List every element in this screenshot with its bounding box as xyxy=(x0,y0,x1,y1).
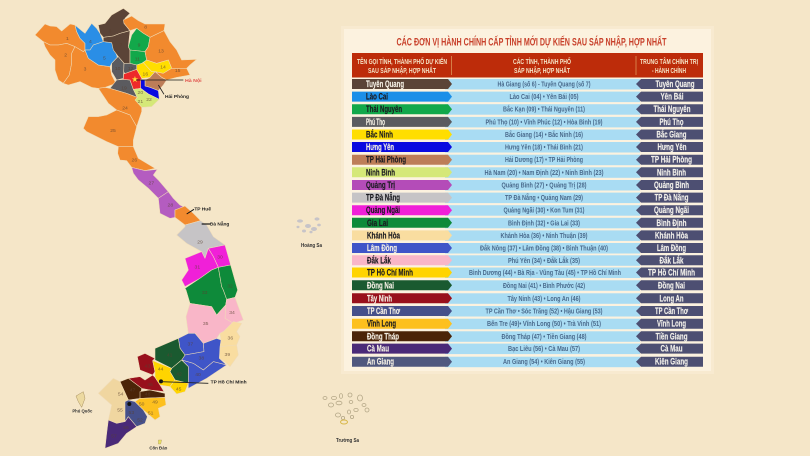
map: southern Vietnam: 50 xyxy=(139,402,145,408)
row: Cà Mau: Bạc Liêu (56) • Cà Mau (57) xyxy=(508,344,580,353)
icon: Hà Nội star: ★ xyxy=(132,77,139,84)
map: northern Vietnam xyxy=(35,8,202,147)
map: southern Vietnam: 46 xyxy=(147,382,153,388)
table header: SÁP NHẬP, HỢP NHẤT xyxy=(514,65,570,75)
islands: Trường Sa xyxy=(323,393,369,420)
map: southern Vietnam: 38 xyxy=(199,356,204,362)
row: Phú Thọ xyxy=(352,117,703,127)
map: northern Vietnam: 5 xyxy=(103,55,106,61)
row: Đồng Tháp: Đồng Tháp xyxy=(367,331,399,341)
map: southern Vietnam: 35 xyxy=(203,321,209,327)
map: southern Vietnam: 47 xyxy=(130,388,136,394)
leader: Hà Nội xyxy=(136,79,183,81)
map: northern Vietnam: 6 xyxy=(109,29,112,35)
row: Tây Ninh: Tây Ninh (43) • Long An (46) xyxy=(508,294,581,303)
title: CÁC ĐƠN VỊ HÀNH CHÍNH CẤP TỈNH MỚI DỰ KIẾN SAU SÁP NHẬP, HỢP NHẤT xyxy=(396,36,667,48)
row: Ninh Bình: Hà Nam (20) • Nam Định (22) • Ninh Bình (23) xyxy=(484,168,604,177)
map: northern Vietnam: 13 xyxy=(158,48,164,54)
row: Ninh Bình: Ninh Bình xyxy=(657,167,686,177)
map: northern Vietnam: 21 xyxy=(138,99,143,105)
row: An Giang xyxy=(352,357,703,367)
row: Gia Lai: Bình Định (32) • Gia Lai (33) xyxy=(508,218,580,227)
row: Gia Lai: Bình Định xyxy=(656,218,686,228)
island: Trường Sa highlighted xyxy=(340,420,348,424)
row: TP Hải Phòng: TP Hải Phòng xyxy=(366,155,406,165)
row: Quảng Ngãi: Quảng Ngãi (30) • Kon Tum (31) xyxy=(504,206,585,215)
map: northern Vietnam: 4 xyxy=(89,39,92,45)
row: Lào Cai: Lào Cai (04) • Yên Bái (05) xyxy=(510,92,579,101)
row: Phú Thọ: Phú Thọ xyxy=(660,117,684,127)
row: Lâm Đồng: Lâm Đồng xyxy=(657,243,686,253)
leader: TP Huế xyxy=(187,209,194,214)
map: southern Vietnam xyxy=(72,265,247,450)
map: central Vietnam: 28 xyxy=(168,203,173,209)
row: Quảng Trị: Quảng Bình xyxy=(654,180,689,190)
row: Bắc Ninh xyxy=(352,128,703,140)
row: Quảng Trị xyxy=(352,180,703,190)
row: Ninh Bình: Ninh Bình xyxy=(366,167,395,177)
row: Vĩnh Long: Vĩnh Long xyxy=(657,319,686,329)
label: Đà Nẵng: Đà Nẵng xyxy=(210,220,229,226)
row: Thái Nguyên: Bắc Kạn (09) • Thái Nguyên (11) xyxy=(503,105,585,114)
map: central Vietnam: 26 xyxy=(132,157,137,163)
row: TP Hồ Chí Minh: TP Hồ Chí Minh xyxy=(648,268,695,278)
row: TP Đà Nẵng: TP Đà Nẵng • Quảng Nam (29) xyxy=(505,193,583,202)
island: Côn Đảo xyxy=(158,440,162,444)
row: TP Hải Phòng xyxy=(352,155,703,165)
map: southern Vietnam: 53 xyxy=(129,410,134,416)
row: Tây Ninh xyxy=(352,293,703,304)
row: Vĩnh Long xyxy=(352,319,703,329)
row: Đồng Tháp: Đồng Tháp (47) • Tiền Giang (48) xyxy=(502,332,587,341)
row: Đắk Lắk: Phú Yên (34) • Đắk Lắk (35) xyxy=(508,256,580,265)
row: Hưng Yên: Hưng Yên xyxy=(366,142,394,152)
row: Hưng Yên: Hưng Yên xyxy=(658,142,686,152)
panel: table background xyxy=(341,26,714,374)
label: Phú Quốc: Phú Quốc xyxy=(72,408,93,414)
row: Khánh Hòa: Khánh Hòa xyxy=(367,230,400,240)
row: Khánh Hòa: Khánh Hòa xyxy=(655,230,688,240)
row: Đồng Nai: Đồng Nai (41) • Bình Phước (42) xyxy=(503,281,585,290)
map: northern Vietnam: 22 xyxy=(146,97,152,103)
row: Thái Nguyên: Thái Nguyên xyxy=(366,104,402,114)
map: southern Vietnam: 37 xyxy=(188,342,193,348)
row: Lâm Đồng: Lâm Đồng xyxy=(367,243,397,253)
row: Hưng Yên xyxy=(352,142,703,152)
row: Bắc Ninh: Bắc Giang xyxy=(656,128,686,140)
map: northern Vietnam: 8 xyxy=(144,24,147,30)
row: Thái Nguyên xyxy=(352,104,703,115)
leader: Hải Phòng xyxy=(158,85,164,94)
table rows xyxy=(352,79,703,367)
leader: Đà Nẵng xyxy=(202,222,210,226)
row: TP Hải Phòng: Hải Dương (17) • TP Hải Phòng xyxy=(505,155,583,164)
table header: - HÀNH CHÍNH xyxy=(652,66,686,75)
row: Phú Thọ: Phú Thọ (10) • Vĩnh Phúc (12) • Hòa Bình (19) xyxy=(486,117,603,126)
row: TP Đà Nẵng: TP Đà Nẵng xyxy=(366,192,400,203)
row: TP Cần Thơ: TP Cần Thơ xyxy=(367,306,400,316)
row: TP Hồ Chí Minh: TP Hồ Chí Minh xyxy=(367,268,413,278)
map: northern Vietnam: 1 xyxy=(66,36,69,42)
row: Hưng Yên: Hưng Yên (18) • Thái Bình (21) xyxy=(505,142,583,152)
map: northern Vietnam: 25 xyxy=(110,128,116,134)
row: TP Cần Thơ: TP Cần Thơ xyxy=(655,306,688,316)
map: northern Vietnam: 12 xyxy=(128,66,134,72)
table header xyxy=(352,53,703,78)
map: southern Vietnam: 40 xyxy=(195,372,201,378)
row: An Giang: Kiên Giang xyxy=(655,357,688,367)
map: southern Vietnam: 48 xyxy=(145,391,151,397)
map: northern Vietnam: 3 xyxy=(84,67,87,73)
label: Côn Đảo: Côn Đảo xyxy=(149,445,167,450)
row: Đồng Tháp xyxy=(352,331,703,342)
row: Cà Mau: Cà Mau xyxy=(660,344,682,354)
map: central Vietnam: 27 xyxy=(149,180,154,186)
row: An Giang: An Giang xyxy=(367,357,394,367)
row: Đồng Nai: Đồng Nai xyxy=(658,280,685,290)
row: Đồng Nai: Đồng Nai xyxy=(367,280,394,290)
label: Hoàng Sa: Hoàng Sa xyxy=(301,243,322,249)
marker: TP Hồ Chí Minh xyxy=(159,379,163,383)
label: Hải Phòng: Hải Phòng xyxy=(165,94,189,99)
map: northern Vietnam: 19 xyxy=(121,85,127,91)
row: Lào Cai: Yên Bái xyxy=(660,92,684,102)
map: southern Vietnam: 39 xyxy=(225,352,230,358)
map: northern Vietnam: 11 xyxy=(135,57,140,63)
map: central Vietnam: 30 xyxy=(217,255,223,261)
row: Tuyên Quang xyxy=(352,79,703,90)
row: Gia Lai xyxy=(352,218,703,228)
row: Cà Mau xyxy=(352,344,703,354)
map: southern Vietnam: 52 xyxy=(137,417,143,423)
label: Hà Nội: Hà Nội xyxy=(185,78,202,83)
row: TP Đà Nẵng xyxy=(352,192,703,203)
map: southern Vietnam: 32 xyxy=(227,283,233,289)
map: central Vietnam xyxy=(118,147,231,287)
table header: CÁC TỈNH, THÀNH PHỐ xyxy=(513,56,571,66)
marker: Cần Thơ xyxy=(127,402,131,406)
map: southern Vietnam: 55 xyxy=(117,408,123,414)
map: southern Vietnam: 42 xyxy=(176,371,182,377)
map: southern Vietnam: 33 xyxy=(202,290,208,296)
row: Cà Mau: Cà Mau xyxy=(367,344,389,354)
map: northern Vietnam: 9 xyxy=(138,43,141,49)
row: Quảng Ngãi: Quảng Ngãi xyxy=(366,205,400,215)
map: northern Vietnam: 15 xyxy=(175,68,181,74)
row: Tuyên Quang: Tuyên Quang xyxy=(656,79,694,89)
row: Quảng Ngãi: Quảng Ngãi xyxy=(654,205,689,215)
leader: TP Hồ Chí Minh xyxy=(161,382,208,383)
label: Trường Sa: Trường Sa xyxy=(336,438,359,444)
row: Lào Cai xyxy=(352,92,703,102)
map: northern Vietnam: 10 xyxy=(115,66,121,72)
row: Đắk Lắk: Đắk Lắk xyxy=(660,254,684,265)
row: Phú Thọ: Phú Thọ xyxy=(366,117,385,127)
table header: SAU SÁP NHẬP, HỢP NHẤT xyxy=(368,65,436,75)
map: southern Vietnam: 44 xyxy=(158,366,164,372)
map: central Vietnam: 29 xyxy=(197,239,203,245)
map: northern Vietnam: 14 xyxy=(160,64,166,70)
row: Bắc Ninh: Bắc Ninh xyxy=(366,128,393,140)
row: Đồng Nai xyxy=(352,280,703,291)
map: northern Vietnam: 20 xyxy=(138,90,143,96)
islands: Hoàng Sa xyxy=(296,217,321,233)
table header: TRUNG TÂM CHÍNH TRỊ xyxy=(640,57,698,66)
table header: TÊN GỌI TỈNH, THÀNH PHỐ DỰ KIẾN xyxy=(357,56,447,66)
row: Lào Cai: Lào Cai xyxy=(366,92,388,102)
map: southern Vietnam: 45 xyxy=(176,386,182,392)
row: TP Cần Thơ xyxy=(352,306,703,316)
row: Bắc Ninh: Bắc Giang (14) • Bắc Ninh (16) xyxy=(505,130,583,139)
row: TP Đà Nẵng: TP Đà Nẵng xyxy=(654,192,688,203)
map: northern Vietnam: 24 xyxy=(122,106,128,112)
map: southern Vietnam: 54 xyxy=(118,391,124,397)
map: southern Vietnam: 34 xyxy=(229,310,235,316)
map: southern Vietnam: 49 xyxy=(152,399,158,405)
map: southern Vietnam: 56 xyxy=(123,425,129,431)
row: Đồng Tháp: Tiền Giang xyxy=(656,331,688,341)
row: Thái Nguyên: Thái Nguyên xyxy=(654,104,690,114)
row: Khánh Hòa xyxy=(352,230,703,241)
row: Đắk Lắk: Đắk Lắk xyxy=(367,254,391,265)
label: TP Huế: TP Huế xyxy=(194,205,211,211)
row: An Giang: An Giang (54) • Kiên Giang (55) xyxy=(503,357,585,366)
row: Lâm Đồng xyxy=(352,243,703,254)
row: Tây Ninh: Long An xyxy=(660,293,684,303)
island: Phú Quốc xyxy=(76,392,85,407)
row: TP Hồ Chí Minh xyxy=(352,268,703,278)
row: Vĩnh Long: Vĩnh Long xyxy=(367,319,396,329)
row: Vĩnh Long: Bến Tre (49)• Vĩnh Long (50) • Trà Vinh (51) xyxy=(487,319,601,328)
map: central Vietnam: 31 xyxy=(195,265,200,271)
row: TP Cần Thơ: TP Cần Thơ • Sóc Trăng (52) • Hậu Giang (53) xyxy=(486,306,603,316)
map: southern Vietnam: 41 xyxy=(167,352,173,358)
row: TP Hồ Chí Minh: Bình Dương (44) • Bà Rịa - Vũng Tàu (45) • TP Hồ Chí Minh xyxy=(469,268,621,277)
row: Khánh Hòa: Khánh Hòa (36) • Ninh Thuận (39) xyxy=(500,231,588,240)
map: southern Vietnam: 57 xyxy=(111,433,117,439)
row: TP Hải Phòng: TP Hải Phòng xyxy=(651,155,692,165)
row: Gia Lai: Gia Lai xyxy=(367,218,388,228)
row: Quảng Trị: Quảng Trị xyxy=(366,180,395,190)
map: southern Vietnam: 43 xyxy=(145,364,150,370)
row: Quảng Trị: Quảng Bình (27) • Quảng Trị (28) xyxy=(502,180,587,190)
label: TP Hồ Chí Minh: TP Hồ Chí Minh xyxy=(211,380,247,385)
row: Đắk Lắk xyxy=(352,254,703,266)
row: Quảng Ngãi xyxy=(352,205,703,216)
row: Tây Ninh: Tây Ninh xyxy=(367,293,392,303)
map: southern Vietnam: 36 xyxy=(228,335,233,341)
row: Ninh Bình xyxy=(352,167,703,178)
map: northern Vietnam: 2 xyxy=(64,53,67,59)
row: Tuyên Quang: Tuyên Quang xyxy=(366,79,404,89)
map: northern Vietnam: 16 xyxy=(143,72,148,78)
row: Lâm Đồng: Đắk Nông (37) • Lâm Đồng (38) • Bình Thuận (40) xyxy=(480,244,608,252)
row: Tuyên Quang: Hà Giang (số 6) - Tuyên Quang (số 7) xyxy=(498,80,591,88)
map: northern Vietnam: 7 xyxy=(120,43,123,49)
map: southern Vietnam: 51 xyxy=(148,411,154,417)
